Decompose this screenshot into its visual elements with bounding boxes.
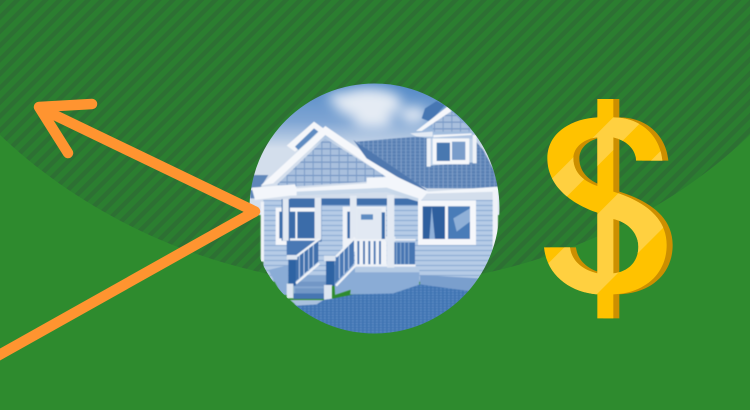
porch railing [286, 239, 416, 267]
foundation [268, 265, 419, 295]
dollar highlights [548, 117, 664, 294]
far roof at left [250, 175, 268, 198]
main roof [357, 137, 503, 188]
porch shadow [290, 198, 418, 242]
house photo in circle [247, 82, 503, 342]
icon: orange arrow [0, 104, 255, 359]
icon: gold dollar sign [544, 99, 673, 318]
right dormer [410, 107, 477, 167]
stair railings [287, 238, 356, 300]
gable trim [261, 126, 399, 186]
porch columns [282, 195, 395, 270]
left window [276, 208, 316, 245]
door [343, 207, 386, 252]
back left dormer [287, 122, 323, 152]
arrow shaft [0, 108, 255, 359]
background: striped dark arc [0, 0, 750, 285]
tree [422, 101, 445, 122]
right window [418, 200, 476, 245]
porch eave [252, 177, 498, 202]
sky [247, 82, 503, 215]
photo: clipped scene [247, 82, 503, 342]
photo: softened scene [247, 82, 503, 342]
dollar face [544, 99, 667, 318]
lawn [294, 284, 468, 334]
dollar shadow [550, 99, 673, 318]
downspout [493, 190, 498, 250]
front steps [293, 265, 355, 299]
walls [263, 200, 497, 282]
gable shingles [277, 138, 387, 187]
arrow head [39, 104, 92, 153]
